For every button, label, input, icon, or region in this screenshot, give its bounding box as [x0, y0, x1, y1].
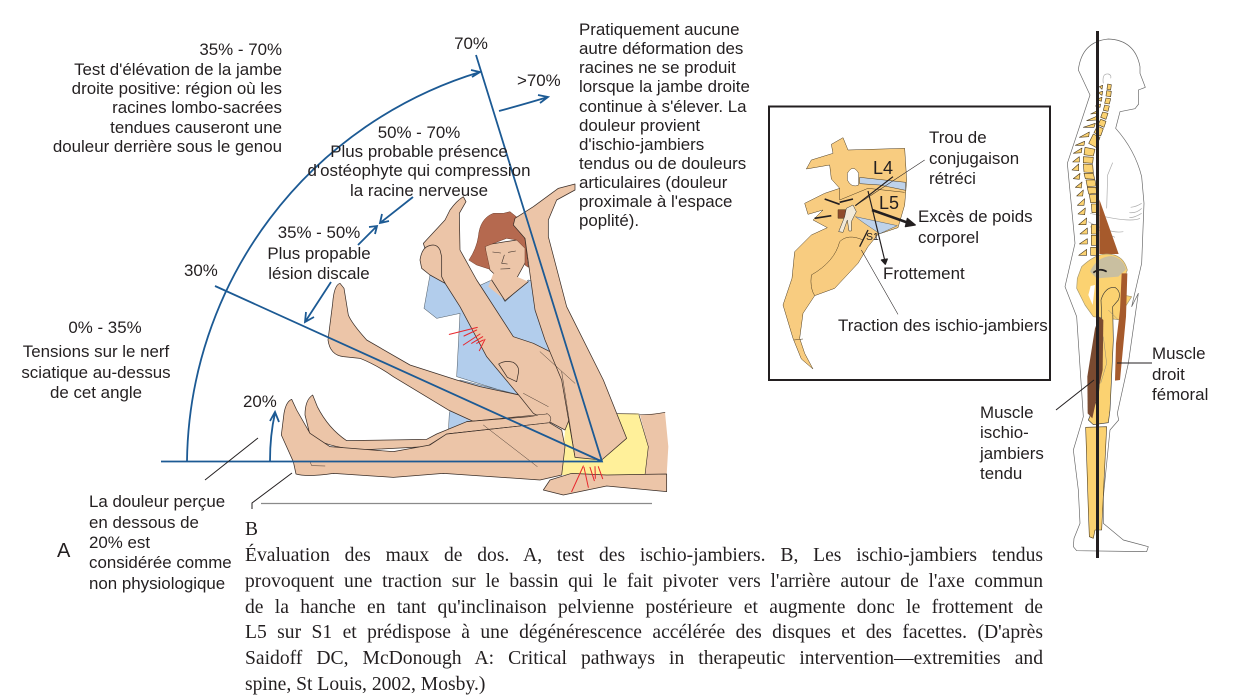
- label: tight hamstring: jambiers: [979, 444, 1044, 463]
- muscle leaders: [1056, 363, 1152, 410]
- table line: [261, 502, 652, 504]
- thigh, shin and muscles: [1086, 273, 1127, 538]
- leader lines: [205, 438, 292, 509]
- label: 35-50 percent: [267, 223, 371, 283]
- force arrows: [815, 177, 915, 264]
- caption: provoquent une traction sur le bassin qui le fait pivoter vers l'arrière autour de l'axe commun: [245, 571, 1043, 592]
- label: above 70 percent explanation: [579, 20, 750, 230]
- label: above 70 percent explanation: d'ischio-jambiers: [579, 135, 704, 154]
- label: above 70 percent explanation: tendus ou de douleurs: [579, 154, 746, 173]
- label: 0-35 percent: de cet angle: [50, 383, 142, 402]
- label: 35-70 percent: racines lombo-sacrées: [112, 98, 282, 117]
- label: rectus femoris: Muscle: [1152, 344, 1206, 363]
- leg raised above 70 percent: [513, 184, 627, 460]
- label: tight hamstring: ischio-: [980, 423, 1029, 442]
- label: 50-70 percent: la racine nerveuse: [350, 181, 488, 200]
- angle lines and arcs: [161, 55, 602, 462]
- pelvis: [1077, 254, 1132, 320]
- label: below 20 percent: considérée comme: [89, 553, 232, 572]
- inset labels: Traction des ischio-jambiers: [838, 316, 1048, 335]
- caption: Évaluation des maux de dos. A, test des ischio-jambiers. B, Les ischio-jambiers tendus: [245, 545, 1043, 566]
- label: above 70 percent explanation: articulaires (douleur: [579, 173, 728, 192]
- label: panel B: B: [245, 519, 258, 540]
- shorts: [547, 413, 648, 475]
- resting hand: [543, 473, 667, 495]
- label: above 70 percent explanation: Pratiquement aucune: [579, 20, 740, 39]
- label: tight hamstring: tendu: [980, 464, 1022, 483]
- label: 50-70 percent: [308, 123, 530, 200]
- label: 0-35 percent: sciatique au-dessus: [21, 363, 171, 382]
- caption: L5 sur S1 et prédispose à une dégénérescence accélérée des disques et des facettes. (D'après: [245, 622, 1043, 643]
- label: below 20 percent: La douleur perçue: [89, 492, 225, 511]
- caption: spine, St Louis, 2002, Mosby.): [245, 674, 485, 695]
- examiner shirt: [424, 275, 560, 432]
- label: above 70 percent explanation: douleur provient: [579, 116, 700, 135]
- inset labels: Frottement: [883, 264, 965, 283]
- label: above 70 percent explanation: poplité).: [579, 211, 639, 230]
- inset labels: rétréci: [929, 169, 976, 188]
- red pain marks, knee and hip: [449, 327, 603, 492]
- label: 0-35 percent: 0% - 35%: [68, 318, 142, 337]
- label: 35-70 percent: droite positive: région où les: [72, 79, 282, 98]
- label: panel A: A: [57, 540, 71, 562]
- label: 30 percent: 30%: [184, 261, 218, 280]
- label: tight hamstring: Muscle: [980, 403, 1034, 422]
- inset labels: corporel: [918, 228, 979, 247]
- body outline: [1065, 39, 1148, 552]
- caption: [245, 544, 1043, 695]
- label: above 70 percent explanation: continue à s'élever. La: [579, 97, 747, 116]
- label: below 20 percent: [89, 492, 232, 593]
- inset labels: S1: [866, 231, 879, 243]
- torso: [640, 412, 668, 475]
- examiner hands: [420, 245, 519, 382]
- label: rectus femoris: [1152, 344, 1208, 404]
- label: above 70 percent explanation: racines ne se produit: [579, 58, 736, 77]
- examiner head and hair: [469, 212, 528, 301]
- label: 35-70 percent: [53, 40, 282, 156]
- inset labels: Excès de poids: [918, 207, 1033, 226]
- label: 35-70 percent: douleur derrière sous le genou: [53, 137, 282, 156]
- inset labels: conjugaison: [929, 149, 1019, 168]
- label: below 20 percent: 20% est: [89, 533, 150, 552]
- inset panel: lumbar spine: [769, 106, 1050, 380]
- label: 35-70 percent: 35% - 70%: [199, 40, 282, 59]
- label: 35-50 percent: 35% - 50%: [278, 223, 360, 242]
- inset labels: [838, 128, 1048, 335]
- label: 35-70 percent: Test d'élévation de la jambe: [74, 60, 282, 79]
- label: above 70 percent explanation: proximale à l'espace: [579, 192, 732, 211]
- leg raised 50 degrees: [423, 197, 572, 430]
- caption: de la hanche en tant qu'inclinaison pelvienne postérieure et augmente donc le frottement de: [245, 597, 1043, 618]
- inset labels: Trou de: [929, 128, 987, 147]
- caption: Saidoff DC, McDonough A: Critical pathways in therapeutic intervention—extremities and: [245, 648, 1043, 669]
- label: below 20 percent: en dessous de: [89, 513, 199, 532]
- lying leg, far: [305, 395, 550, 450]
- standing body figure with spine: [1065, 39, 1148, 552]
- label: 35-50 percent: Plus propable: [267, 244, 371, 263]
- label: 50-70 percent: 50% - 70%: [378, 123, 460, 142]
- label: 50-70 percent: Plus probable présence: [330, 142, 508, 161]
- label: tight hamstring: [979, 403, 1044, 483]
- illustration: examiner raising patient's leg: [281, 184, 668, 495]
- label: 35-50 percent: lésion discale: [268, 264, 370, 283]
- inset labels: L5: [879, 193, 899, 213]
- label: below 20 percent: non physiologique: [89, 574, 225, 593]
- label: 20 percent: 20%: [243, 392, 277, 411]
- label: 50-70 percent: d'ostéophyte qui compression: [308, 161, 530, 180]
- label: above 70 percent explanation: autre déformation des: [579, 39, 743, 58]
- label: 0-35 percent: Tensions sur le nerf: [23, 342, 170, 361]
- ear and chest details: [1088, 74, 1142, 237]
- label: above 70 percent explanation: lorsque la jambe droite: [579, 77, 750, 96]
- center of gravity line: [1096, 31, 1099, 558]
- inset labels: L4: [873, 158, 893, 178]
- label: above 70 percent: >70%: [517, 71, 561, 90]
- label: 35-70 percent: tendues causeront une: [110, 118, 282, 137]
- vertebral column: [1072, 84, 1111, 255]
- leg raised 30 degrees: [328, 283, 550, 426]
- lumbosacral spine illustration: [783, 138, 925, 369]
- near lying leg and foot: [281, 399, 565, 480]
- label: rectus femoris: droit: [1152, 365, 1185, 384]
- abdominal muscle: [1099, 199, 1119, 254]
- label: 0-35 percent: [21, 318, 171, 402]
- label: 70 percent: 70%: [454, 34, 488, 53]
- label: rectus femoris: fémoral: [1152, 385, 1208, 404]
